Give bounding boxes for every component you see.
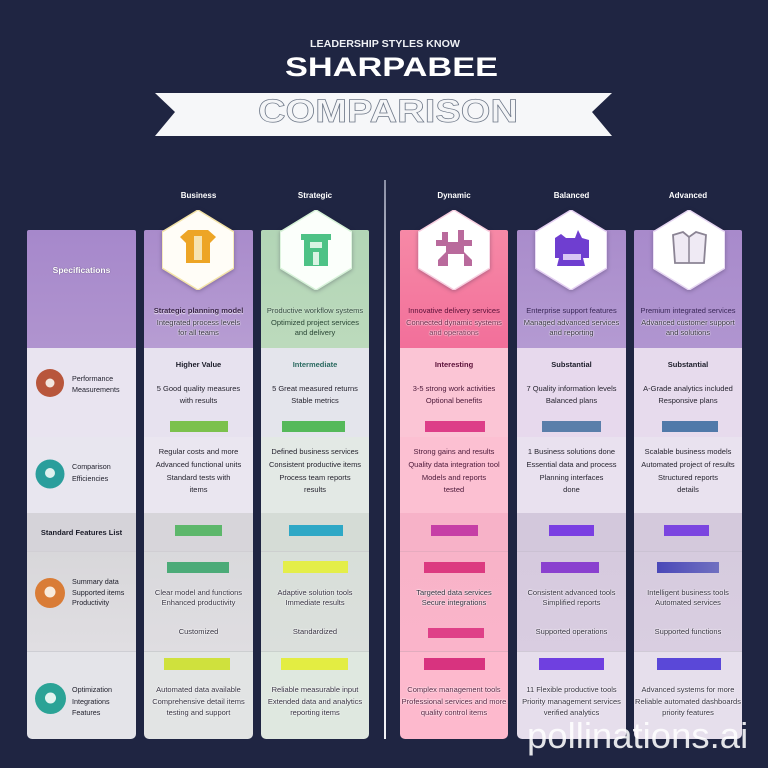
text: row four: Intelligent business tools	[647, 588, 729, 597]
panel: column four: Managed advanced services	[524, 318, 619, 327]
bar: violet	[549, 525, 594, 536]
panel: column two: and delivery	[295, 328, 335, 337]
eyebrow text: LEADERSHIP STYLES KNOW	[310, 39, 461, 50]
panel: row labels column: Efficiencies	[72, 474, 108, 483]
panel: column one: for all teams	[178, 328, 219, 337]
panel: column two: Standardized	[293, 627, 337, 636]
text: description: Strategic planning model	[154, 306, 243, 315]
label: row two: Comparison	[72, 462, 111, 471]
text: row five: Advanced systems for more	[642, 685, 734, 694]
bar: rose	[424, 562, 485, 573]
icon: teal circle	[36, 460, 64, 488]
text: row two: Scalable business models	[645, 447, 731, 456]
column caption 1: Business	[181, 191, 216, 200]
panel: column four: Balanced plans	[546, 396, 597, 405]
panel: column two: results	[304, 485, 326, 494]
panel: column one: Enhanced productivity	[162, 598, 235, 607]
panel: column four: Planning interfaces	[540, 473, 603, 482]
column caption 3: Dynamic	[437, 191, 471, 200]
bar: magenta	[425, 421, 485, 432]
panel: column four: Priority management services	[522, 697, 621, 706]
panel: column four: Simplified reports	[543, 598, 600, 607]
text: row five: Reliable measurable input	[272, 685, 358, 694]
panel: column four: Essential data and process	[526, 460, 617, 469]
text: row five: Complex management tools	[407, 685, 501, 694]
text: description: Enterprise support features	[526, 306, 617, 315]
panel: column five: Supported functions	[655, 627, 721, 636]
icon: orange circle	[35, 578, 65, 608]
label: row four: Summary data	[72, 577, 119, 586]
bar: rose short	[428, 628, 484, 638]
panel: row labels column: Integrations	[72, 697, 110, 706]
panel: column two: Optimized project services	[271, 318, 359, 327]
panel: column two: Consistent productive items	[269, 460, 361, 469]
panel: column one: Integrated process levels	[157, 318, 240, 327]
bar: emerald	[167, 562, 229, 573]
panel: column one: with results	[180, 396, 217, 405]
text: row one: Intermediate	[293, 360, 337, 369]
panel: column three: 3-5 strong work activities	[413, 384, 495, 393]
panel: column five: A-Grade analytics included	[643, 384, 733, 393]
banner heading: COMPARISON	[258, 93, 518, 129]
panel: column two: reporting items	[290, 708, 340, 717]
panel: row labels column: Supported items	[72, 588, 124, 597]
panel: column one: Advanced functional units	[156, 460, 241, 469]
panel: column five: details	[677, 485, 699, 494]
panel: column one	[144, 210, 253, 739]
bar: yellow two	[281, 658, 348, 670]
panel: row labels column: Measurements	[72, 385, 120, 394]
panel: column two: Stable metrics	[291, 396, 339, 405]
icon: orange hexagon badge	[160, 210, 236, 293]
ribbon banner	[155, 93, 612, 136]
bar: indigo	[657, 658, 721, 670]
text: row one: Substantial	[551, 360, 592, 369]
bar: purple magenta	[431, 525, 478, 536]
panel: column one: Customized	[179, 627, 218, 636]
panel: column four: verified analytics	[544, 708, 599, 717]
panel: column five: Reliable automated dashboards	[635, 697, 741, 706]
panel: column five: and solutions	[666, 328, 710, 337]
label: row three: Standard Features List	[41, 528, 122, 537]
panel: column two	[261, 210, 369, 739]
text: row one: Substantial	[668, 360, 708, 369]
panel: column three: quality control items	[421, 708, 487, 717]
panel: column five: Automated services	[655, 598, 721, 607]
icon: grey hexagon badge	[651, 210, 727, 293]
panel: column five	[634, 210, 742, 739]
panel: column five: Responsive plans	[658, 396, 718, 405]
bar: slate blue	[542, 421, 601, 432]
panel: column four: done	[563, 485, 580, 494]
vertical divider	[384, 180, 386, 739]
column caption 5: Advanced	[669, 191, 707, 200]
panel: column two: Process team reports	[279, 473, 351, 482]
title block	[285, 39, 498, 80]
text: description: Productive workflow systems	[267, 306, 363, 315]
text: row four: Targeted data services	[416, 588, 492, 597]
icon: pink hexagon badge	[416, 210, 492, 293]
panel: column one: Standard tests with	[167, 473, 230, 482]
text: row four: Clear model and functions	[155, 588, 242, 597]
panel: column one: Comprehensive detail items	[152, 697, 245, 706]
icon: green hexagon badge	[278, 210, 354, 293]
panel: row labels column: Productivity	[72, 598, 109, 607]
text: row two: Regular costs and more	[159, 447, 238, 456]
text: description: Innovative delivery services	[408, 306, 500, 315]
text: row two: Strong gains and results	[414, 447, 494, 456]
text: row four: Adaptive solution tools	[277, 588, 353, 597]
icon: red circle	[36, 369, 64, 397]
panel: column five: Structured reports	[658, 473, 718, 482]
bar: lime	[164, 658, 230, 670]
bar: green short	[175, 525, 222, 536]
bar: violet	[664, 525, 709, 536]
panel: column three	[400, 210, 508, 739]
bar: indigo fade	[657, 562, 719, 573]
panel: column five: Automated project of results	[641, 460, 735, 469]
bar: violet three	[539, 658, 604, 670]
panel: column four: Supported operations	[536, 627, 607, 636]
panel: column three: and operations	[429, 328, 479, 337]
column caption 4: Balanced	[554, 191, 589, 200]
panel: column one: 5 Good quality measures	[157, 384, 240, 393]
panel: column two: Extended data and analytics	[268, 697, 362, 706]
panel: column one: testing and support	[167, 708, 230, 717]
icon: teal circle two	[35, 683, 66, 714]
panel: column five: priority features	[662, 708, 714, 717]
panel: column two: 5 Great measured returns	[272, 384, 358, 393]
panel: column one: items	[190, 485, 207, 494]
panel: column three: Professional services and more	[402, 697, 506, 706]
bar: green	[170, 421, 228, 432]
text: row five: 11 Flexible productive tools	[526, 685, 617, 694]
text: row one: Higher Value	[176, 360, 221, 369]
bar: cyan	[289, 525, 343, 536]
text: description: Premium integrated services	[640, 306, 736, 315]
panel: column three: Optional benefits	[426, 396, 482, 405]
panel: column three: Models and reports	[422, 473, 486, 482]
text: row five: Automated data available	[156, 685, 241, 694]
bar: steel blue	[662, 421, 718, 432]
panel: column four: and reporting	[549, 328, 594, 337]
panel: column three: Secure integrations	[422, 598, 486, 607]
text: row one: Interesting	[435, 360, 473, 369]
panel: column four: 7 Quality information levels	[526, 384, 617, 393]
bar: yellow	[283, 561, 348, 573]
bar: green	[282, 421, 345, 432]
text: row two: 1 Business solutions done	[528, 447, 615, 456]
panel: column three: Quality data integration tool	[408, 460, 500, 469]
label: row five: Optimization	[72, 685, 112, 694]
column caption 2: Strategic	[298, 191, 332, 200]
panel: column three: Connected dynamic systems	[406, 318, 502, 327]
panel: column four	[517, 210, 626, 739]
panel: row labels column: Features	[72, 708, 100, 717]
label: row one: Performance	[72, 374, 113, 383]
text: row two: Defined business services	[271, 447, 359, 456]
text: row four: Consistent advanced tools	[528, 588, 615, 597]
icon: violet hexagon badge	[533, 210, 609, 293]
heading: specifications: Specifications	[53, 265, 110, 275]
watermark: pollinations.ai	[527, 715, 748, 756]
bar: rose two	[424, 658, 485, 670]
panel: column two: Immediate results	[285, 598, 345, 607]
bar: violet two	[541, 562, 599, 573]
panel: column three: tested	[444, 485, 464, 494]
panel: column five: Advanced customer support	[641, 318, 735, 327]
panel: row labels column	[27, 230, 136, 739]
